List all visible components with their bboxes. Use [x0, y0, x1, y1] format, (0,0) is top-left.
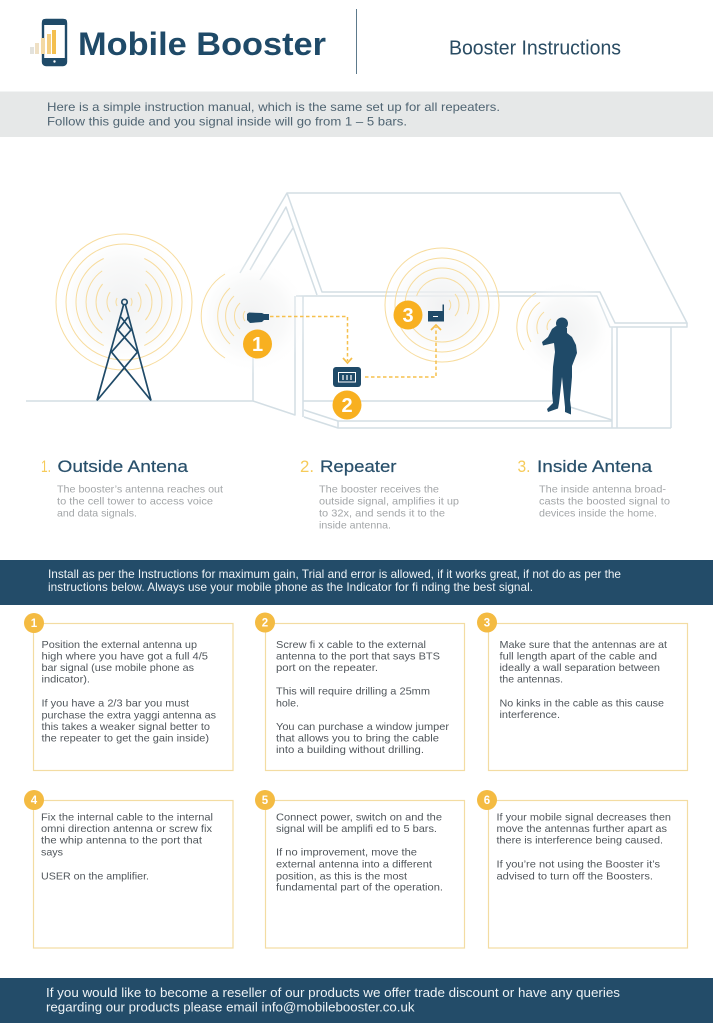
card 1: If you have a 2/3 bar you must	[42, 698, 189, 710]
step 3: Inside Antena: devices inside the home.	[539, 508, 657, 520]
card 1	[24, 613, 233, 770]
card 6: there is interference being caused.	[496, 836, 663, 846]
illustration: signal path from tower to house	[26, 193, 687, 428]
card 5: 5	[262, 795, 269, 807]
heading: Booster Instructions: Booster Instructions	[449, 38, 621, 60]
badge 3: 3	[402, 305, 414, 327]
card 3	[477, 612, 688, 770]
card 5	[255, 790, 464, 948]
badge 2: 2	[341, 395, 353, 417]
card 2: that allows you to bring the cable	[276, 734, 439, 744]
step 1: Outside Antena: and data signals.	[57, 508, 137, 520]
instruction band: Install as per the Instructions for maximum gain, Trial and error is allowed, if it works great, if not do as per the	[48, 568, 621, 581]
card 6: If your mobile signal decreases then	[496, 812, 671, 824]
icon: outside antenna	[247, 312, 269, 323]
icon: person on phone	[542, 318, 577, 414]
card 3: No kinks in the cable as this cause	[500, 698, 664, 710]
card 4: 4	[31, 795, 38, 807]
signal rings: inside antenna	[383, 246, 501, 364]
card 5: signal will be amplifi ed to 5 bars.	[276, 824, 437, 835]
card 2: 2	[262, 618, 268, 630]
card 3: full length apart of the cable and	[500, 652, 657, 662]
card 5: external antenna into a different	[276, 860, 432, 870]
icon: repeater	[333, 367, 361, 387]
card 6: 6	[484, 795, 490, 807]
card 4	[24, 790, 233, 948]
step 3: Inside Antena: Inside Antena	[537, 457, 653, 476]
card 6: If you’re not using the Booster it’s	[496, 860, 660, 870]
card 1: high where you have got a full 4/5	[42, 652, 208, 662]
card 5: If no improvement, move the	[276, 848, 417, 858]
card 1: this takes a weaker signal better to	[42, 722, 210, 733]
card 3: interference.	[500, 710, 560, 721]
badge 2	[332, 390, 362, 420]
card 4: says	[41, 848, 63, 858]
step 1: Outside Antena: to the cell tower to access voice	[57, 496, 213, 508]
step 3: Inside Antena	[518, 457, 670, 520]
card 4: omni direction antenna or screw fix	[41, 824, 213, 835]
card 2: into a building without drilling.	[276, 745, 424, 756]
card 5: Connect power, switch on and the	[276, 812, 442, 824]
card 5: position, as this is the most	[276, 872, 407, 882]
step 2: Repeater: Repeater	[320, 457, 397, 476]
step 3: Inside Antena: 3.	[518, 457, 530, 476]
step 1: Outside Antena	[41, 457, 223, 520]
step 2: Repeater: 2.	[300, 457, 314, 476]
card 2: antenna to the port that says BTS	[276, 652, 440, 662]
card 3: Make sure that the antennas are at	[500, 640, 667, 651]
logo wordmark: Mobile Booster	[78, 26, 326, 62]
icon: phone with signal bars	[30, 19, 67, 65]
card 2	[255, 612, 464, 770]
instruction band	[0, 560, 713, 605]
step 1: Outside Antena: 1.	[41, 457, 51, 476]
step 2: Repeater: inside antenna.	[319, 520, 391, 532]
footer band: If you would like to become a reseller of our products we offer trade discount or have any queries	[46, 986, 620, 1000]
instruction band: instructions below. Always use your mobile phone as the Indicator for fi nding the best signal.	[48, 581, 533, 594]
step 1: Outside Antena: Outside Antena	[58, 457, 189, 476]
logo: Mobile Booster	[30, 19, 326, 65]
card 5: fundamental part of the operation.	[276, 882, 443, 894]
card 1: Position the external antenna up	[42, 640, 197, 651]
card 2: hole.	[276, 698, 299, 710]
badge 3	[394, 300, 422, 330]
step 2: Repeater: The booster receives the	[319, 484, 439, 496]
card 6: advised to turn off the Boosters.	[496, 872, 653, 882]
icon: inside antenna	[428, 304, 444, 322]
signal rings: person	[516, 280, 616, 380]
arrow: antenna to repeater	[270, 316, 352, 363]
card 6	[477, 790, 688, 948]
signal rings: tower	[54, 232, 194, 372]
card 6: move the antennas further apart as	[496, 824, 667, 835]
card 4: Fix the internal cable to the internal	[41, 812, 213, 824]
card 1: indicator).	[42, 674, 90, 686]
card 1: purchase the extra yaggi antenna as	[42, 710, 216, 722]
icon: cell tower	[97, 299, 151, 400]
card 2: port on the repeater.	[276, 663, 378, 674]
step 2: Repeater: outside signal, amplifies it up	[319, 496, 459, 508]
intro band	[0, 92, 713, 137]
badge 1: 1	[252, 334, 263, 356]
signal rings: outside antenna	[194, 258, 310, 374]
step 2: Repeater: to 32x, and sends it to the	[319, 508, 445, 520]
intro band: Here is a simple instruction manual, which is the same set up for all repeaters.	[47, 100, 500, 114]
card 4: USER on the amplifier.	[41, 872, 149, 882]
card 3: 3	[484, 618, 490, 630]
step 1: Outside Antena: The booster’s antenna reaches out	[57, 484, 223, 496]
step 2: Repeater	[300, 457, 459, 532]
card 2: This will require drilling a 25mm	[276, 686, 430, 698]
footer band: regarding our products please email info@mobilebooster.co.uk	[46, 1000, 415, 1014]
card 3: the antennas.	[500, 674, 563, 686]
step 3: Inside Antena: The inside antenna broad-	[539, 484, 666, 496]
card 1: the repeater to get the gain inside)	[42, 734, 209, 744]
card 1: 1	[31, 618, 38, 630]
card 2: You can purchase a window jumper	[276, 722, 450, 733]
intro band: Follow this guide and you signal inside will go from 1 – 5 bars.	[47, 114, 407, 128]
footer band	[0, 978, 713, 1023]
house outline	[26, 193, 687, 428]
card 1: bar signal (use mobile phone as	[42, 663, 194, 674]
step 3: Inside Antena: casts the boosted signal to	[539, 496, 670, 508]
arrow: repeater to inside antenna	[365, 325, 441, 377]
card 4: the whip antenna to the port that	[41, 836, 202, 846]
card 2: Screw fi x cable to the external	[276, 640, 426, 651]
card 3: ideally a wall separation between	[500, 663, 660, 674]
badge 1	[243, 330, 272, 358]
